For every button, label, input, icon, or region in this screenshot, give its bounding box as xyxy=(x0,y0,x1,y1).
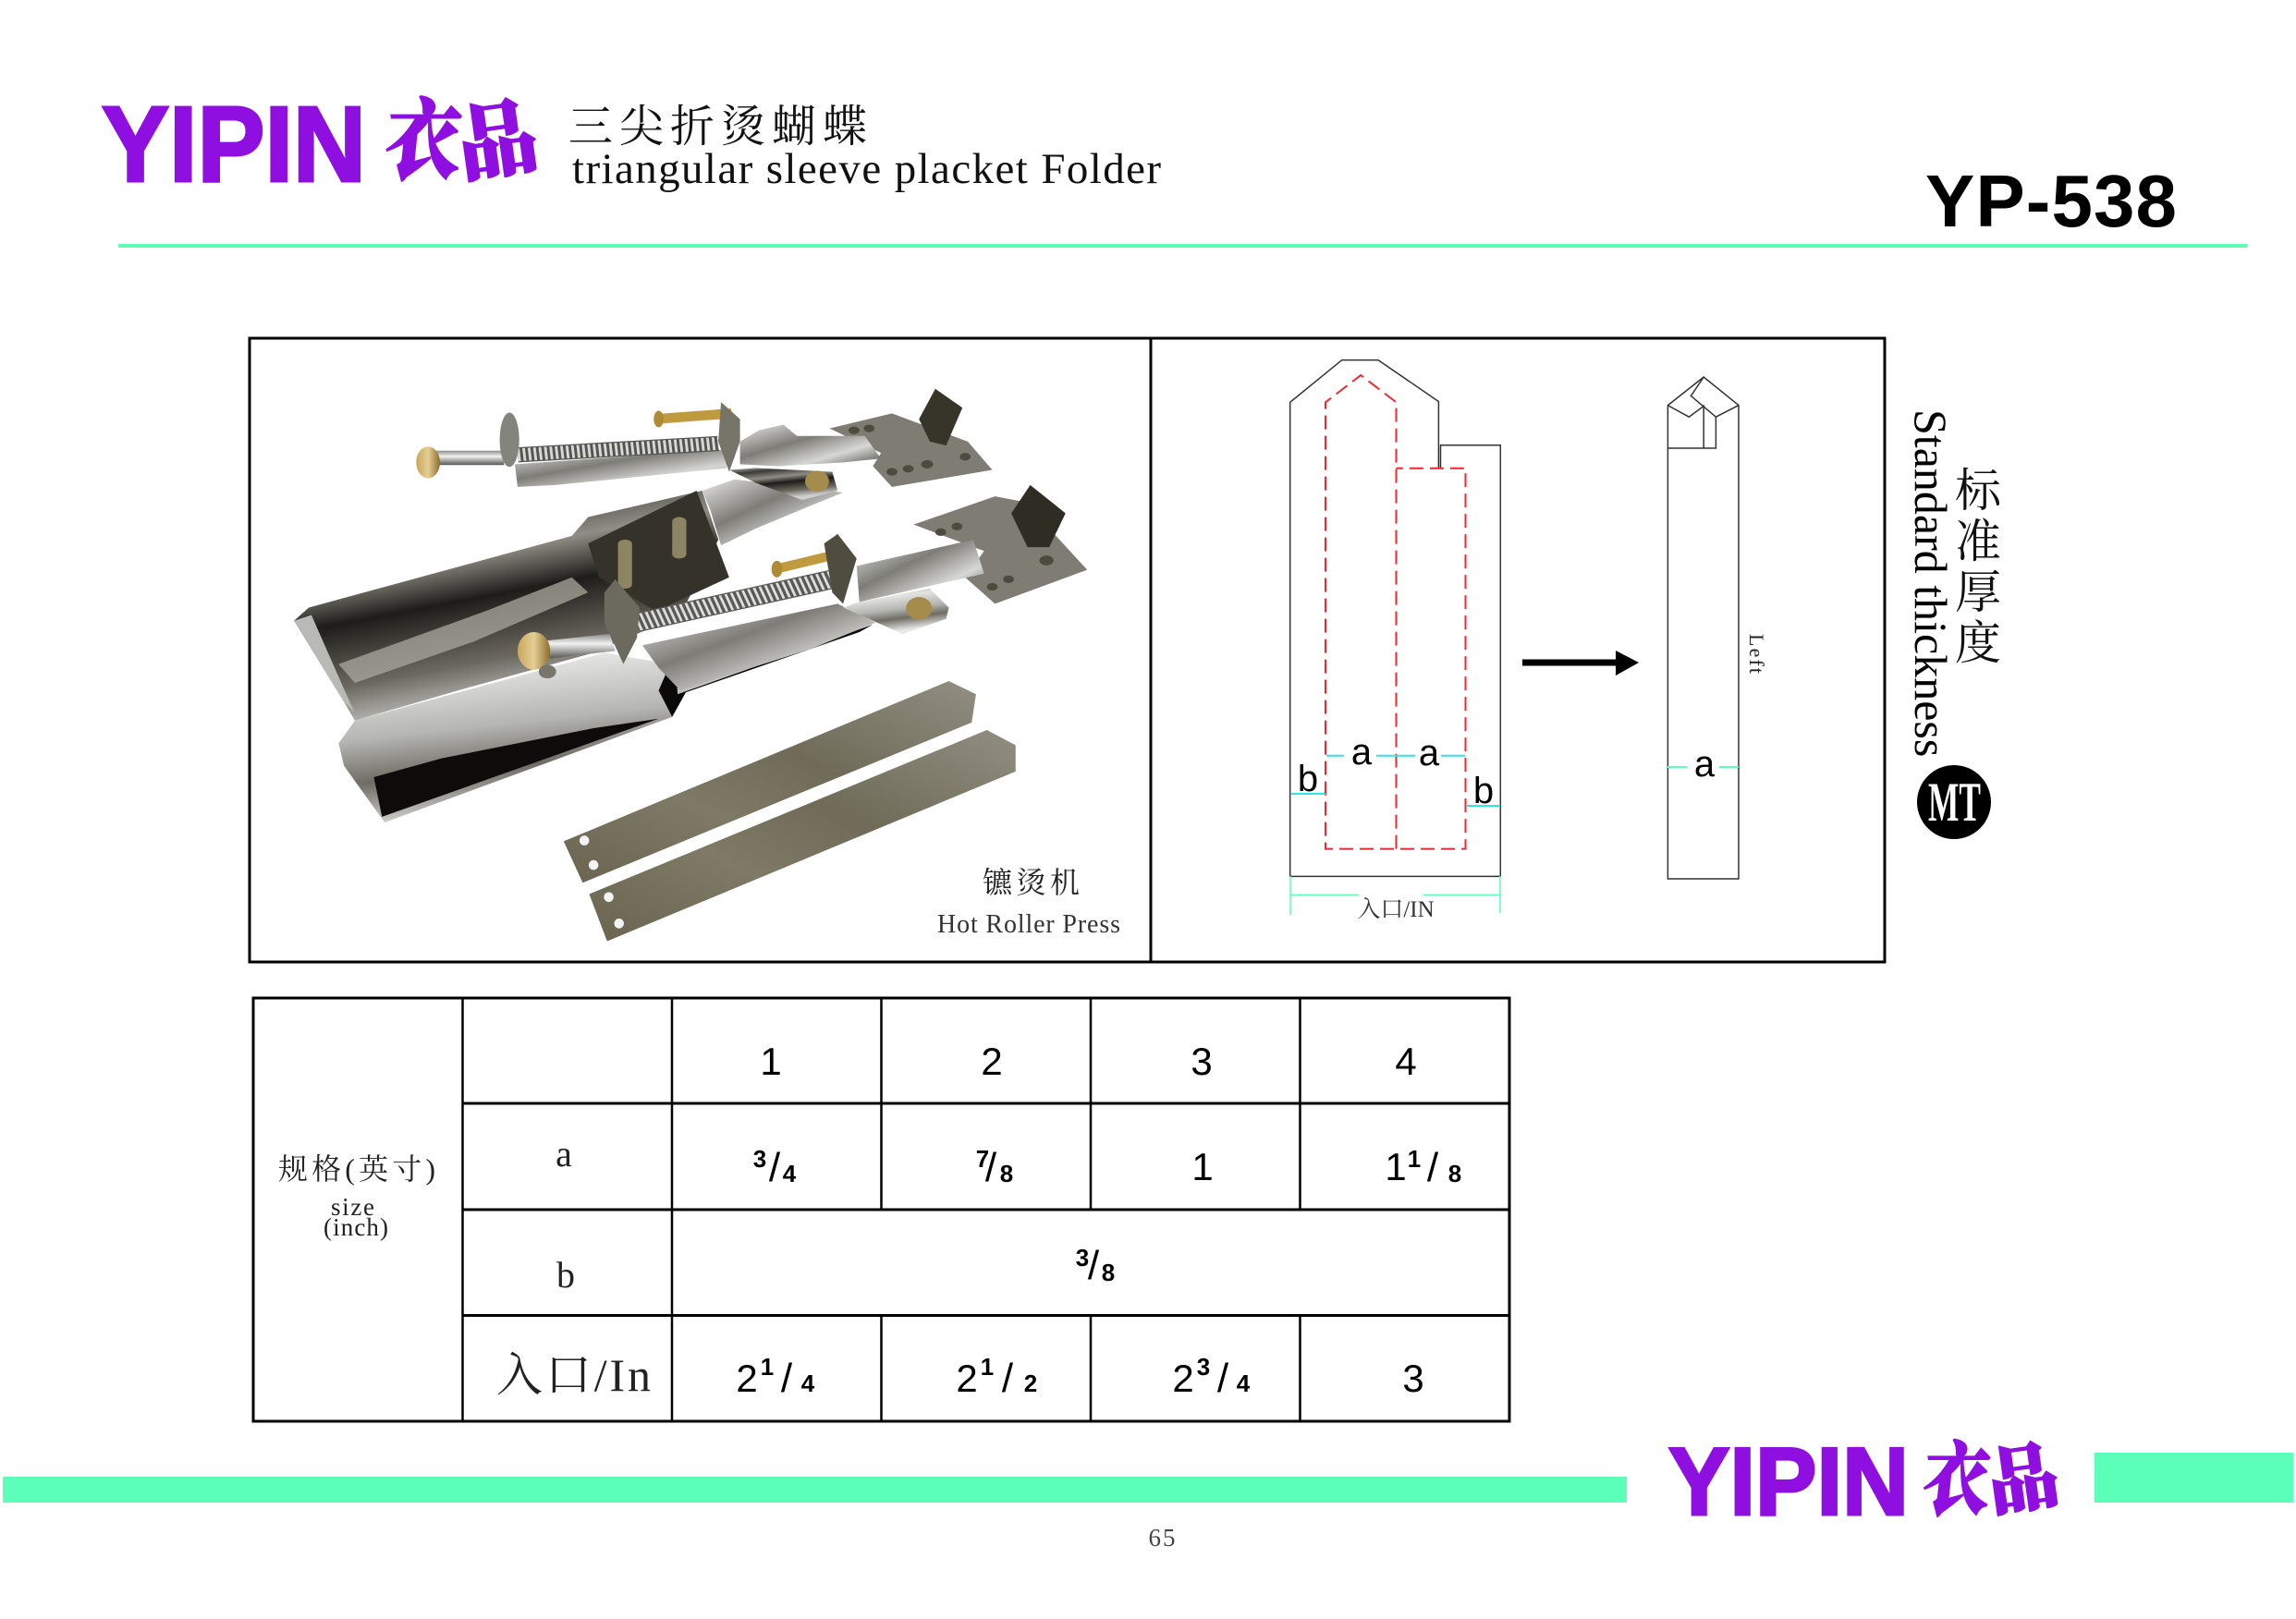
upper bent plate xyxy=(718,402,740,472)
strip holes xyxy=(580,835,624,929)
header logo: YIPIN xyxy=(102,84,366,204)
row a: 1 xyxy=(1385,1145,1407,1188)
upper base plate xyxy=(515,449,729,487)
row a: 8 xyxy=(1448,1160,1461,1187)
row b: / xyxy=(1088,1243,1100,1288)
row inlet: / xyxy=(781,1356,793,1401)
row a: 8 xyxy=(1000,1160,1013,1187)
lower rod xyxy=(539,634,616,659)
row b xyxy=(556,1243,1115,1296)
footer logo: 品 xyxy=(1980,1417,2065,1531)
photo caption: 镳烫机 xyxy=(983,866,1080,899)
header logo: 品 xyxy=(449,71,544,200)
product title: 三尖折烫蝴蝶 xyxy=(568,103,867,152)
upper hinge bracket xyxy=(919,389,962,445)
upper disc xyxy=(500,413,519,467)
central bracket xyxy=(588,491,729,612)
dimension a and b labels: b xyxy=(1473,771,1494,811)
footer bar right xyxy=(2094,1453,2293,1503)
folded measure xyxy=(1667,766,1739,768)
panel: product and diagram frame xyxy=(250,338,1885,962)
row inlet: 2 xyxy=(1024,1369,1037,1397)
row inlet: 3 xyxy=(1197,1353,1210,1381)
row a: / xyxy=(769,1145,781,1190)
photo: hot roller press folder xyxy=(294,389,1087,942)
lower scoop xyxy=(338,623,873,822)
standard thickness label: 标准厚度 xyxy=(1955,465,2003,669)
row a: / xyxy=(985,1145,997,1190)
table grid xyxy=(253,998,1509,1421)
size row label xyxy=(278,1152,435,1241)
main scoop upper xyxy=(294,491,718,721)
dimension a and b labels: b xyxy=(1298,759,1318,799)
lower cross plate xyxy=(913,496,1087,603)
standard thickness label xyxy=(1905,409,2003,757)
footer logo: YIPIN xyxy=(1668,1429,1909,1536)
footer bar left xyxy=(3,1477,1627,1503)
header numbers: 3 xyxy=(1191,1040,1213,1083)
product title: triangular sleeve placket Folder xyxy=(572,145,1161,193)
row a: 7 xyxy=(976,1145,989,1173)
lower spring xyxy=(637,579,832,623)
outer outline xyxy=(1290,360,1500,876)
dimension a and b labels: a xyxy=(1351,732,1373,773)
row inlet: 1 xyxy=(761,1353,774,1381)
row a: a xyxy=(556,1133,572,1175)
size row label: 规格(英寸) xyxy=(278,1152,435,1186)
row a: 3 xyxy=(753,1145,766,1173)
metal strip 2 xyxy=(589,730,1016,942)
row inlet: 3 xyxy=(1402,1357,1424,1400)
row inlet: 1 xyxy=(981,1353,994,1381)
MT badge xyxy=(1917,765,1991,839)
scoop rim xyxy=(294,615,355,713)
row a: 4 xyxy=(783,1160,797,1187)
upper brass bolt xyxy=(656,413,732,419)
inlet dimension: 入口/IN xyxy=(1357,896,1435,922)
bracket slots xyxy=(618,517,686,589)
header numbers: 4 xyxy=(1395,1040,1417,1083)
row a: 1 xyxy=(1408,1145,1421,1173)
left label: Left xyxy=(1745,634,1768,674)
bolts xyxy=(849,425,1054,590)
MT badge: MT xyxy=(1928,772,1981,833)
row inlet: / xyxy=(1002,1356,1014,1401)
row b: 3 xyxy=(1076,1244,1089,1272)
black sliver xyxy=(659,625,873,717)
upper arm xyxy=(740,425,881,466)
row inlet: 2 xyxy=(736,1357,758,1400)
row a xyxy=(556,1133,1461,1190)
header rule xyxy=(118,244,2247,248)
header numbers: 1 xyxy=(760,1040,782,1083)
upper rod xyxy=(436,451,504,465)
header logo: 衣 xyxy=(380,69,469,198)
lower scoop interior xyxy=(373,719,659,817)
header numbers xyxy=(760,1040,1417,1083)
size row label: (inch) xyxy=(324,1213,388,1241)
row inlet xyxy=(496,1349,1424,1401)
row b: 8 xyxy=(1102,1259,1115,1286)
upper neck tubes xyxy=(702,480,843,545)
metal strip 1 xyxy=(564,681,976,883)
lower lobe xyxy=(843,589,949,634)
lower spring plate xyxy=(642,603,875,690)
dimension a and b labels xyxy=(1298,732,1494,811)
row a: 1 xyxy=(1191,1145,1214,1188)
diagram: folded placket xyxy=(1667,377,1768,879)
diagram: unfolded placket xyxy=(1290,360,1500,922)
page number: 65 xyxy=(1148,1524,1178,1552)
model number: YP-538 xyxy=(1925,160,2177,242)
size table xyxy=(253,998,1509,1421)
lower brass bolt xyxy=(776,553,843,569)
upper cross plate xyxy=(829,413,993,487)
scoop reflection xyxy=(338,578,588,683)
lower bent plate xyxy=(824,534,857,603)
row inlet: 2 xyxy=(1172,1357,1194,1400)
diagram: folded placket: a xyxy=(1694,744,1716,785)
header logo xyxy=(102,69,544,204)
product title xyxy=(568,103,1161,193)
header numbers: 2 xyxy=(981,1040,1003,1083)
lower knob xyxy=(518,632,550,670)
row b: b xyxy=(556,1254,575,1296)
upper spring xyxy=(518,444,718,455)
lower disc xyxy=(605,579,640,664)
photo caption xyxy=(937,866,1120,939)
standard thickness label: Standard thickness xyxy=(1905,409,1957,757)
row inlet: / xyxy=(1217,1356,1229,1401)
photo caption: Hot Roller Press xyxy=(937,910,1120,939)
dimension a and b labels: a xyxy=(1419,733,1440,773)
red dashed fold lines xyxy=(1325,375,1466,849)
row inlet: 4 xyxy=(1237,1369,1251,1397)
upper knob xyxy=(416,446,440,478)
row inlet: 4 xyxy=(801,1369,815,1397)
arrow xyxy=(1522,651,1639,676)
row inlet: 2 xyxy=(956,1357,978,1400)
lower arm xyxy=(857,540,984,602)
row inlet: 入口/In xyxy=(496,1349,651,1401)
footer logo xyxy=(1668,1416,2065,1536)
size row label: size xyxy=(331,1193,374,1221)
lower hinge bracket xyxy=(1011,485,1066,547)
footer logo: 衣 xyxy=(1918,1416,1997,1531)
cyan measures xyxy=(1291,756,1500,806)
row a: / xyxy=(1427,1145,1439,1190)
upper lobe xyxy=(729,468,837,500)
